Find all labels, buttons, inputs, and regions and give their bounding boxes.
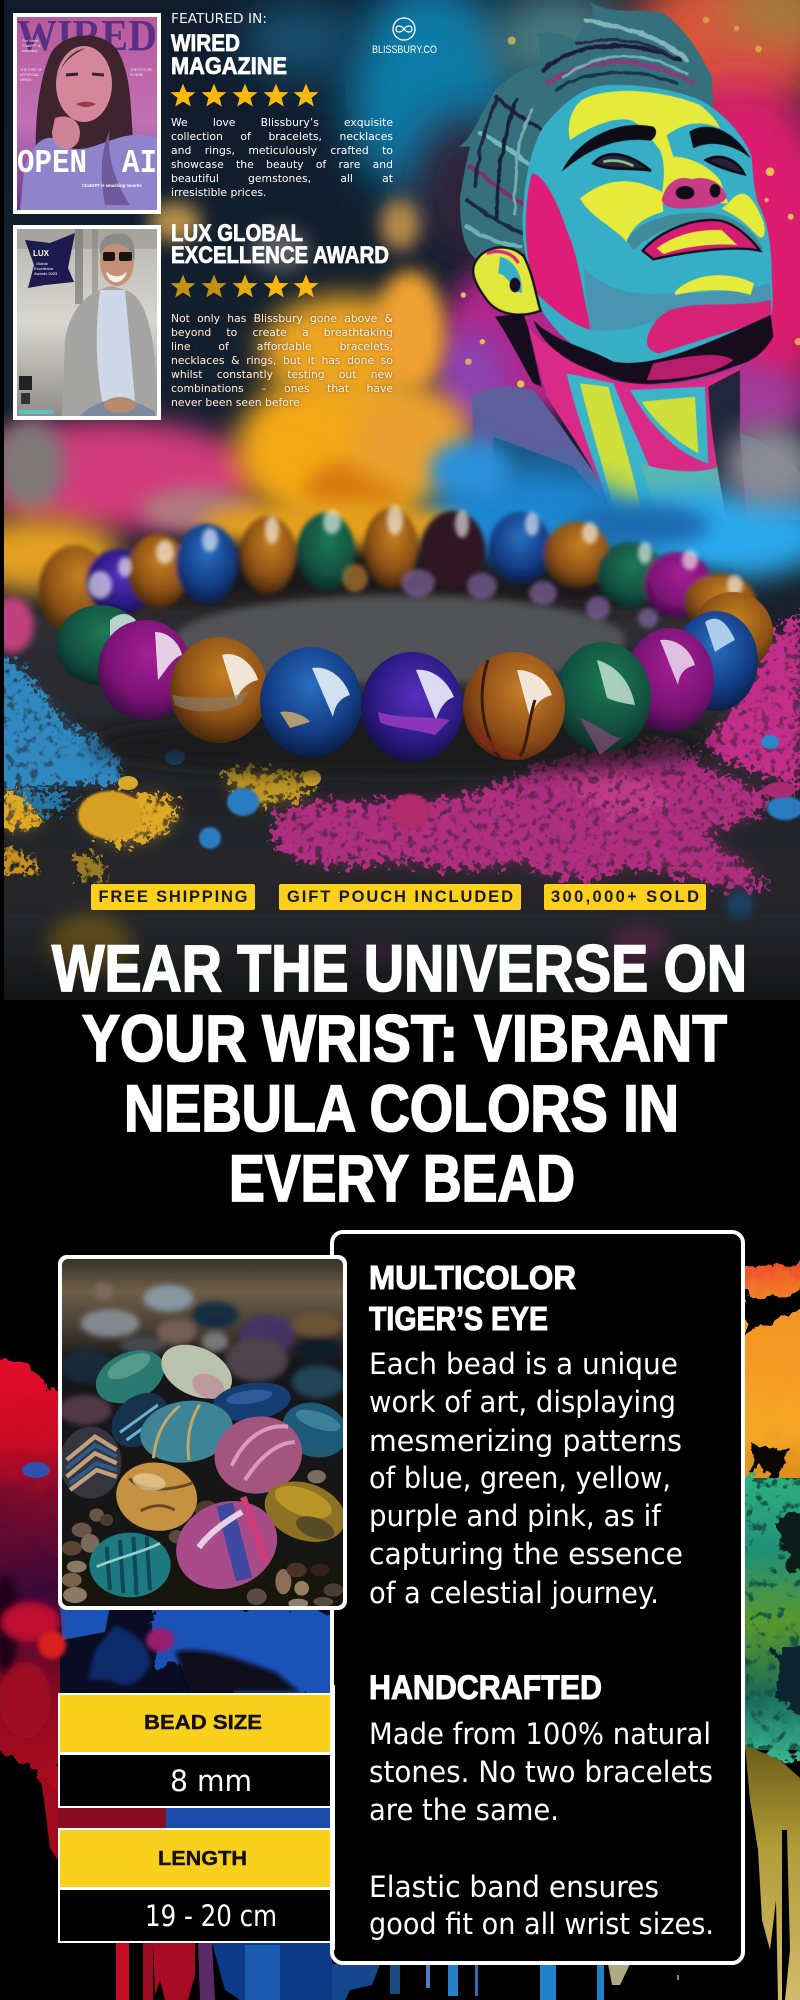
badges (91, 884, 706, 910)
hero photo background (0, 0, 800, 1010)
mouth (643, 220, 760, 259)
ear (473, 247, 541, 315)
cover side copy: IS NOW (130, 73, 144, 77)
wired review text: showcase the beauty of rare and (171, 158, 393, 171)
award review text: Not only has Blissbury gone above & (171, 312, 393, 325)
cover side copy: MINDS (20, 78, 32, 82)
award review text: whilst constantly testing out new (171, 368, 393, 381)
text: handcrafted description (369, 1717, 714, 1941)
blue paint strip under image (0, 1602, 340, 1738)
neck (528, 328, 753, 520)
bead size spec: 8 mm (170, 1764, 252, 1798)
cover side copy: THE FUTURE (130, 68, 153, 72)
magenta bead (626, 628, 714, 732)
cover side copy: THE RISE OF (20, 68, 43, 72)
neck-side shadow (495, 313, 542, 387)
text: handcrafted description: Made from 100% natural (369, 1717, 711, 1751)
length spec: LENGTH (158, 1847, 247, 1870)
blue bead (260, 647, 362, 757)
shadow behind bracelet (60, 555, 740, 615)
cover headline: OPEN AI (17, 145, 157, 182)
violet bead (361, 652, 463, 762)
award heading (171, 220, 389, 269)
hair (458, 2, 713, 260)
cover badge: LUX (33, 249, 50, 258)
cover badge: Awards 2023 (34, 271, 58, 276)
wired star rating (170, 84, 318, 106)
face base (522, 85, 773, 371)
man in blazer (62, 233, 157, 416)
nebula colour clouds (0, 0, 800, 593)
paint strip between size tables (40, 1775, 332, 1860)
cover side copy (20, 39, 153, 82)
pink powder right (272, 610, 800, 890)
illustrated face (458, 2, 800, 520)
jaw shadow (533, 315, 773, 384)
right paint splash (735, 1262, 800, 2000)
sparkles (461, 17, 800, 388)
hair strands (467, 20, 693, 247)
badge: free shipping: FREE SHIPPING (98, 888, 248, 906)
text: tiger's eye description: mesmerizing patterns (369, 1424, 682, 1458)
powder lumps (48, 735, 800, 975)
paint drips at bottom (116, 1943, 679, 2000)
wired review text: We love Blissbury’s exquisite (171, 116, 393, 129)
right rear bead (693, 592, 773, 672)
wired review text: irresistible prices. (171, 186, 266, 199)
text: handcrafted description: are the same. (369, 1793, 559, 1827)
text: tiger's eye description: Each bead is a unique (369, 1347, 678, 1381)
description card (332, 1232, 743, 1963)
cover side copy: smashing (22, 49, 37, 53)
award review text: combinations – ones that have (171, 382, 393, 395)
award review text (171, 312, 394, 409)
wired heading: WIRED (171, 30, 240, 57)
text: tiger's eye description: purple and pink, as if (369, 1499, 662, 1533)
left green bead (56, 605, 144, 685)
tiger bead (463, 652, 565, 760)
sponsor logos (19, 376, 32, 390)
text: handcrafted description: stones. No two bracelets (369, 1755, 713, 1789)
ground (4, 598, 800, 918)
award heading: LUX GLOBAL (171, 220, 303, 247)
pebbles (62, 1470, 343, 1608)
bead shadow on table (90, 715, 710, 775)
yellow powder left (0, 770, 320, 880)
card edge over table (331, 1685, 335, 1950)
jaw pink (647, 300, 772, 353)
main title (52, 931, 747, 1215)
large stones (87, 1340, 173, 1414)
main title: EVERY BEAD (229, 1141, 575, 1215)
wired review text (171, 116, 393, 199)
award star rating (170, 274, 318, 298)
length spec: 19 - 20 cm (145, 1899, 277, 1933)
bracelet (39, 505, 773, 762)
brand logo: BLISSBURY.CO (372, 44, 437, 56)
stones photo (58, 1255, 355, 1612)
magazine cover: Lux award (13, 225, 161, 420)
brows (562, 125, 656, 172)
table patch (175, 595, 625, 685)
wired review text: collection of bracelets, necklaces (171, 130, 393, 143)
back row of beads (39, 508, 756, 635)
shirt collar (472, 387, 613, 500)
heading: multicolor tiger's eye: TIGER’S EYE (369, 1300, 548, 1337)
badge: sold count: 300,000+ SOLD (551, 888, 699, 906)
brand logo (372, 18, 437, 56)
cover side copy: ChatGPT is (22, 44, 41, 48)
pink powder far left (0, 597, 34, 653)
text: tiger's eye description: capturing the essence (369, 1537, 683, 1571)
heading: multicolor tiger's eye: MULTICOLOR (369, 1259, 576, 1296)
eyes (593, 154, 651, 171)
nose (662, 178, 727, 209)
green bead (555, 642, 651, 752)
cover badge (25, 233, 75, 288)
award heading: EXCELLENCE AWARD (171, 242, 389, 269)
featured label: FEATURED IN: (171, 12, 267, 27)
forehead highlight (569, 91, 728, 203)
wired heading (171, 30, 287, 80)
bead size spec: BEAD SIZE (144, 1711, 262, 1734)
left paint splash (0, 1352, 70, 1791)
powder soft underlay (0, 620, 800, 885)
text: tiger's eye description: of blue, green, yellow, (369, 1461, 671, 1495)
blurred back stones (58, 1282, 345, 1425)
wired review text: beautiful gemstones, all at (171, 172, 393, 185)
length spec (59, 1829, 331, 1942)
cover badge: Global (36, 261, 48, 266)
main title: NEBULA COLORS IN (124, 1071, 679, 1145)
chin highlight (675, 275, 754, 295)
face pink shadow (526, 173, 592, 330)
left edge strip (0, 0, 4, 1000)
award review text: never been seen before. (171, 396, 303, 409)
bead size spec (59, 1694, 331, 1807)
cover side copy: ARTIFICIAL (20, 73, 39, 77)
cover masthead: WIRED (17, 11, 157, 60)
text: handcrafted description: Elastic band ensures (369, 1870, 659, 1904)
amber bead (170, 637, 268, 743)
cover badge: Excellence (34, 266, 54, 271)
right blue bead (674, 611, 758, 711)
beard texture (583, 267, 772, 331)
badge: free shipping (91, 884, 255, 910)
wired review text: and rings, meticulously crafted to (171, 144, 393, 157)
wired heading: MAGAZINE (171, 53, 287, 80)
text: tiger's eye description (369, 1347, 683, 1610)
badge: gift pouch: GIFT POUCH INCLUDED (287, 888, 513, 906)
text: handcrafted description: good fit on all wrist sizes. (369, 1907, 714, 1941)
cover portrait (20, 35, 157, 210)
magazine cover: Wired (13, 11, 161, 214)
moustache (627, 213, 763, 252)
hero bottom fade (0, 900, 800, 1000)
left magenta bead (98, 620, 192, 720)
heading: handcrafted: HANDCRAFTED (369, 1669, 602, 1707)
coloured powder cloud over shirt (200, 425, 800, 580)
award review text: beyond to create a breathtaking (171, 326, 393, 339)
badge: gift pouch (279, 884, 521, 910)
back bead highlights (88, 505, 743, 599)
text: tiger's eye description: work of art, displaying (369, 1385, 676, 1419)
reflections under back beads (342, 564, 658, 628)
award review text: line of affordable bracelets, (171, 340, 393, 353)
blue powder left (0, 660, 122, 813)
award review text: necklaces & rings, but it has done so (171, 354, 393, 367)
cheek highlight (580, 181, 663, 242)
magazine cover: Wired: ChatGPT is smashing records (82, 183, 142, 188)
heading: multicolor tiger's eye (369, 1259, 576, 1337)
badge: sold count (544, 884, 706, 910)
lower cheek (633, 251, 763, 284)
text: tiger's eye description: of a celestial journey. (369, 1576, 659, 1610)
cover side copy: The Week (22, 39, 39, 43)
